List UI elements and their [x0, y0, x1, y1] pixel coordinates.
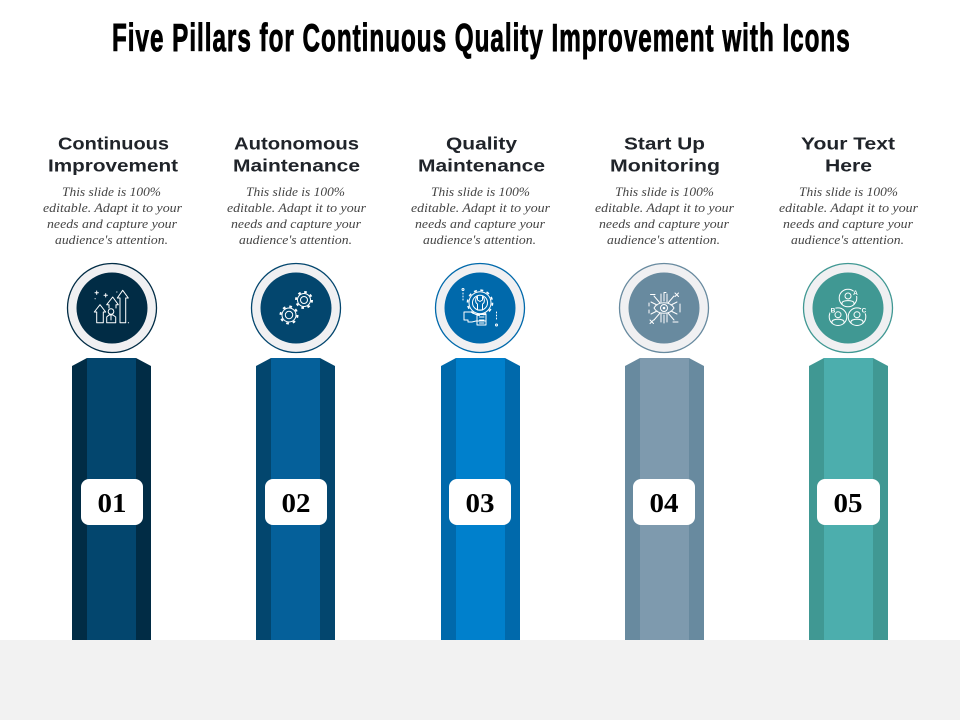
description 2: editable. Adapt it to your: [227, 201, 366, 215]
icon badge 5: three people network: [804, 264, 892, 352]
panel: pillar 2 autonomous maintenance: [227, 134, 366, 640]
panel: pillar 5 your text here: [779, 134, 918, 640]
description 2: [227, 185, 366, 247]
icon badge 5: three people network: B: [831, 308, 836, 314]
description 3: editable. Adapt it to your: [411, 201, 550, 215]
panel: pillar 3 quality maintenance: [411, 134, 550, 640]
description 4: editable. Adapt it to your: [595, 201, 734, 215]
pillar column 2: [256, 358, 335, 640]
heading 5: Here: [825, 156, 872, 176]
heading 4: Monitoring: [610, 156, 720, 176]
description 4: audience's attention.: [607, 233, 720, 247]
pillar column 3: [441, 358, 520, 640]
heading 3: [418, 134, 545, 176]
description 3: [411, 185, 550, 247]
heading 4: Start Up: [624, 134, 705, 154]
description 1: needs and capture your: [47, 217, 177, 231]
number tag 04: 04: [650, 488, 678, 518]
panel: pillar 1 continuous improvement: [43, 134, 182, 640]
heading 1: Improvement: [48, 156, 178, 176]
number tag 02: 02: [282, 488, 310, 518]
number tag 03: 03: [466, 488, 494, 518]
description 4: [595, 185, 734, 247]
description 3: needs and capture your: [415, 217, 545, 231]
icon badge 5: three people network: A: [853, 290, 858, 297]
description 4: needs and capture your: [599, 217, 729, 231]
pillar column 4: [625, 358, 704, 640]
description 3: This slide is 100%: [431, 185, 530, 199]
description 1: audience's attention.: [55, 233, 168, 247]
description 3: audience's attention.: [423, 233, 536, 247]
number tag 04: [633, 479, 695, 525]
heading 5: Your Text: [801, 134, 895, 154]
description 1: editable. Adapt it to your: [43, 201, 182, 215]
icon badge 5: three people network: C: [862, 308, 867, 314]
description 1: [43, 185, 182, 247]
heading 2: Autonomous: [234, 134, 359, 154]
number tag 01: 01: [98, 488, 126, 518]
number tag 03: [449, 479, 511, 525]
footer band: [0, 640, 960, 720]
number tag 05: 05: [834, 488, 862, 518]
description 5: This slide is 100%: [799, 185, 898, 199]
description 5: [779, 185, 918, 247]
heading 2: [233, 134, 360, 176]
heading 4: [610, 134, 720, 176]
number tag 01: [81, 479, 143, 525]
number tag 05: [817, 479, 880, 525]
icon badge 1: growth arrows: [68, 264, 156, 352]
description 2: audience's attention.: [239, 233, 352, 247]
description 4: This slide is 100%: [615, 185, 714, 199]
heading 5: [801, 134, 895, 176]
description 2: This slide is 100%: [246, 185, 345, 199]
title: Five Pillars for Continuous Quality Improvement with Icons: [112, 16, 850, 59]
description 1: This slide is 100%: [62, 185, 161, 199]
icon badge 4: circuit eye: [620, 264, 708, 352]
description 5: audience's attention.: [791, 233, 904, 247]
pillar column 5: [809, 358, 888, 640]
heading 1: Continuous: [58, 134, 169, 154]
icon badge 3: gear, wrench and hand: [436, 264, 524, 352]
heading 2: Maintenance: [233, 156, 360, 176]
icon badge 2: gears: [252, 264, 340, 352]
heading 1: [48, 134, 178, 176]
description 2: needs and capture your: [231, 217, 361, 231]
heading 3: Maintenance: [418, 156, 545, 176]
heading 3: Quality: [446, 134, 517, 154]
description 5: editable. Adapt it to your: [779, 201, 918, 215]
description 5: needs and capture your: [783, 217, 913, 231]
panel: pillar 4 start up monitoring: [595, 134, 734, 640]
pillar column 1: [72, 358, 151, 640]
number tag 02: [265, 479, 327, 525]
